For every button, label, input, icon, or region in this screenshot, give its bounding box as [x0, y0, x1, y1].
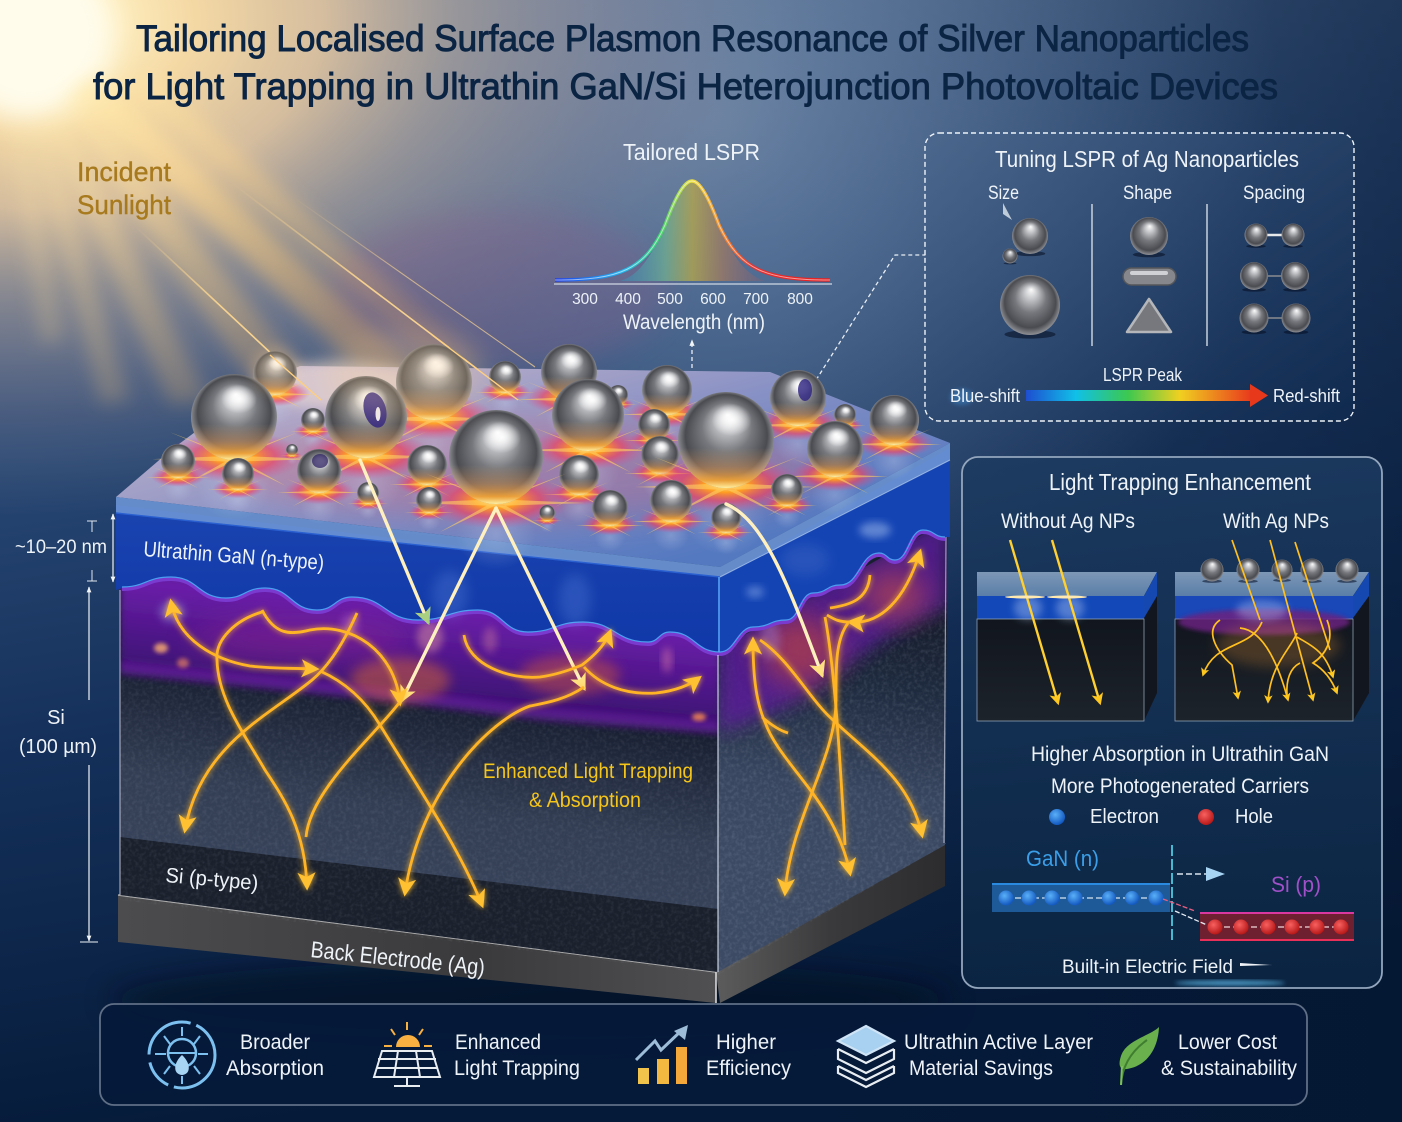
- panel: tuning LSPR of Ag nanoparticles: Size: [988, 183, 1019, 204]
- silicon front face: Si (p-type): [165, 864, 259, 895]
- built-in electric field label: Built-in Electric Field: [1062, 956, 1233, 978]
- icon: efficiency bars and arrow: [636, 1025, 688, 1084]
- junction band diagram: [992, 845, 1354, 942]
- junction band diagram: GaN (n): [1026, 846, 1099, 871]
- shape variants: [1123, 217, 1176, 332]
- text: lower cost and sustainability: & Sustainability: [1161, 1057, 1297, 1080]
- chart: tailored LSPR spectrum: 800: [787, 291, 813, 308]
- chart: tailored LSPR spectrum: 700: [743, 291, 769, 308]
- panel: tuning LSPR of Ag nanoparticles: Tuning LSPR of Ag Nanoparticles: [995, 146, 1299, 172]
- panel: light trapping enhancement: Without Ag NPs: [1001, 509, 1135, 533]
- panel: light trapping enhancement: Light Trapping Enhancement: [1049, 469, 1312, 495]
- dashed connector arrows: [692, 255, 926, 445]
- back electrode (Ag): Back Electrode (Ag): [309, 936, 486, 980]
- incident light beams: [360, 460, 822, 700]
- chart: tailored LSPR spectrum: [554, 139, 832, 334]
- label: incident sunlight: [77, 157, 171, 220]
- icon: green leaf: [1120, 1027, 1159, 1085]
- main device: layered solar cell block: [110, 330, 950, 1040]
- panel: tuning LSPR of Ag nanoparticles: Spacing: [1243, 183, 1305, 204]
- chart: tailored LSPR spectrum: 300: [572, 291, 598, 308]
- ultrathin GaN layer side: [720, 448, 950, 654]
- back electrode (Ag): [118, 843, 945, 1003]
- text: higher efficiency: Higher: [716, 1031, 776, 1054]
- silicon side face: [718, 515, 950, 980]
- scattered light arrows: [171, 552, 922, 905]
- dimension: Si thickness: [19, 587, 98, 942]
- LSPR shift arrow: [1026, 384, 1268, 407]
- text: higher efficiency: [706, 1031, 791, 1080]
- label: incident sunlight: Sunlight: [77, 190, 171, 220]
- text: enhanced light trapping: [454, 1031, 580, 1080]
- text: ultrathin active layer: Material Savings: [909, 1057, 1053, 1080]
- carrier legend: [1049, 805, 1273, 828]
- chart: tailored LSPR spectrum: 600: [700, 291, 726, 308]
- top surface: [116, 361, 950, 972]
- callout: enhanced light trapping: Enhanced Light Trapping: [483, 759, 693, 783]
- text: ultrathin active layer: [904, 1031, 1093, 1080]
- panel: key benefits: [100, 1004, 1307, 1105]
- panel: light trapping enhancement: Higher Absorption in Ultrathin GaN: [1031, 742, 1329, 766]
- icon: broader absorption: [149, 1022, 215, 1088]
- title: for Light Trapping in Ultrathin GaN/Si Heterojunction Photovoltaic Devices: [93, 65, 1278, 107]
- text: lower cost and sustainability: [1161, 1031, 1297, 1080]
- panel: light trapping enhancement: With Ag NPs: [1223, 509, 1329, 533]
- silicon front face: [120, 570, 720, 980]
- dimension: GaN thickness: ~10–20 nm: [15, 537, 107, 558]
- dimension: Si thickness: (100 µm): [19, 736, 97, 758]
- icon: solar panel with sun: [374, 1022, 440, 1086]
- text: broader absorption: Absorption: [226, 1057, 324, 1080]
- dimension: Si thickness: Si: [47, 707, 65, 729]
- panel: tuning LSPR of Ag nanoparticles: [925, 133, 1354, 421]
- chart: tailored LSPR spectrum: Tailored LSPR: [623, 139, 760, 165]
- panel: light trapping enhancement: More Photogenerated Carriers: [1051, 774, 1309, 798]
- chart: tailored LSPR spectrum: 500: [657, 291, 683, 308]
- spacing pairs: [1240, 224, 1310, 334]
- callout: enhanced light trapping: [483, 759, 693, 812]
- callout: enhanced light trapping: & Absorption: [529, 788, 641, 812]
- icon: ultrathin stacked layers: [838, 1026, 894, 1087]
- text: enhanced light trapping: Light Trapping: [454, 1057, 580, 1080]
- text: broader absorption: [226, 1031, 324, 1080]
- junction band diagram: Si (p): [1271, 872, 1321, 897]
- chart: tailored LSPR spectrum: 400: [615, 291, 641, 308]
- mini cell: with Ag NPs: [1175, 540, 1369, 721]
- carrier legend: Electron: [1090, 805, 1159, 828]
- ultrathin GaN layer front: [116, 505, 720, 654]
- chart: tailored LSPR spectrum: Wavelength (nm): [623, 311, 765, 334]
- size spheres: [1000, 203, 1060, 339]
- built-in electric field label: [1062, 956, 1285, 986]
- carrier legend: Hole: [1235, 805, 1273, 828]
- text: higher efficiency: Efficiency: [706, 1057, 791, 1080]
- label: incident sunlight: Incident: [77, 157, 171, 187]
- title: [93, 17, 1278, 107]
- dimension: GaN thickness: [15, 514, 113, 582]
- panel: tuning LSPR of Ag nanoparticles: Blue-shift: [950, 386, 1020, 406]
- sun and rays: [0, 0, 535, 405]
- panel: tuning LSPR of Ag nanoparticles: Red-shift: [1273, 386, 1340, 406]
- panel: tuning LSPR of Ag nanoparticles: LSPR Peak: [1103, 364, 1183, 385]
- text: enhanced light trapping: Enhanced: [455, 1031, 541, 1054]
- mini cell: without Ag NPs: [977, 540, 1157, 721]
- panel: light trapping enhancement: [962, 457, 1382, 988]
- text: ultrathin active layer: Ultrathin Active Layer: [904, 1031, 1093, 1054]
- panel: tuning LSPR of Ag nanoparticles: Shape: [1123, 183, 1172, 204]
- silver nanoparticles: [146, 330, 941, 570]
- shadow beneath block: [110, 960, 950, 1040]
- text: broader absorption: Broader: [240, 1031, 310, 1054]
- title: Tailoring Localised Surface Plasmon Resonance of Silver Nanoparticles: [136, 17, 1249, 59]
- ultrathin GaN layer front: Ultrathin GaN (n-type): [143, 537, 325, 575]
- text: lower cost and sustainability: Lower Cost: [1178, 1031, 1277, 1054]
